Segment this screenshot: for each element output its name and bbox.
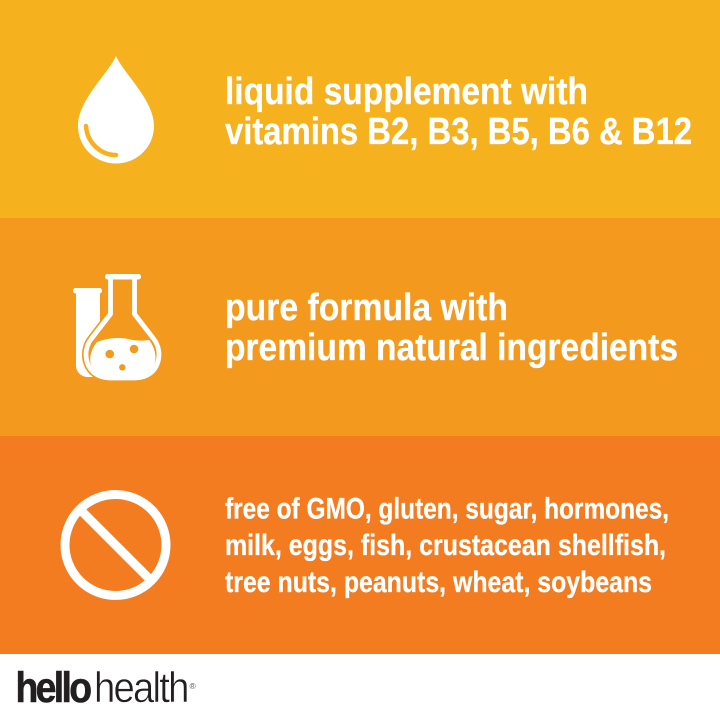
logo: hellohealth: health: [94, 663, 189, 711]
panel: free of allergens: [0, 436, 720, 654]
icon: prohibition sign: [65, 494, 166, 596]
text: free of list: tree nuts, peanuts, wheat, soybeans: [225, 566, 652, 599]
text: pure formula heading: pure formula with: [225, 287, 508, 329]
logo: hellohealth: ®: [190, 681, 196, 691]
panel: pure formula: [0, 218, 720, 436]
icon: water drop: [78, 56, 154, 164]
text: liquid supplement heading: liquid supplement with: [225, 71, 588, 113]
icon: test tube and flask: [73, 274, 159, 378]
panel: liquid supplement: [0, 0, 720, 218]
logo: hellohealth: [16, 663, 196, 712]
logo: hellohealth: hello: [16, 665, 92, 712]
